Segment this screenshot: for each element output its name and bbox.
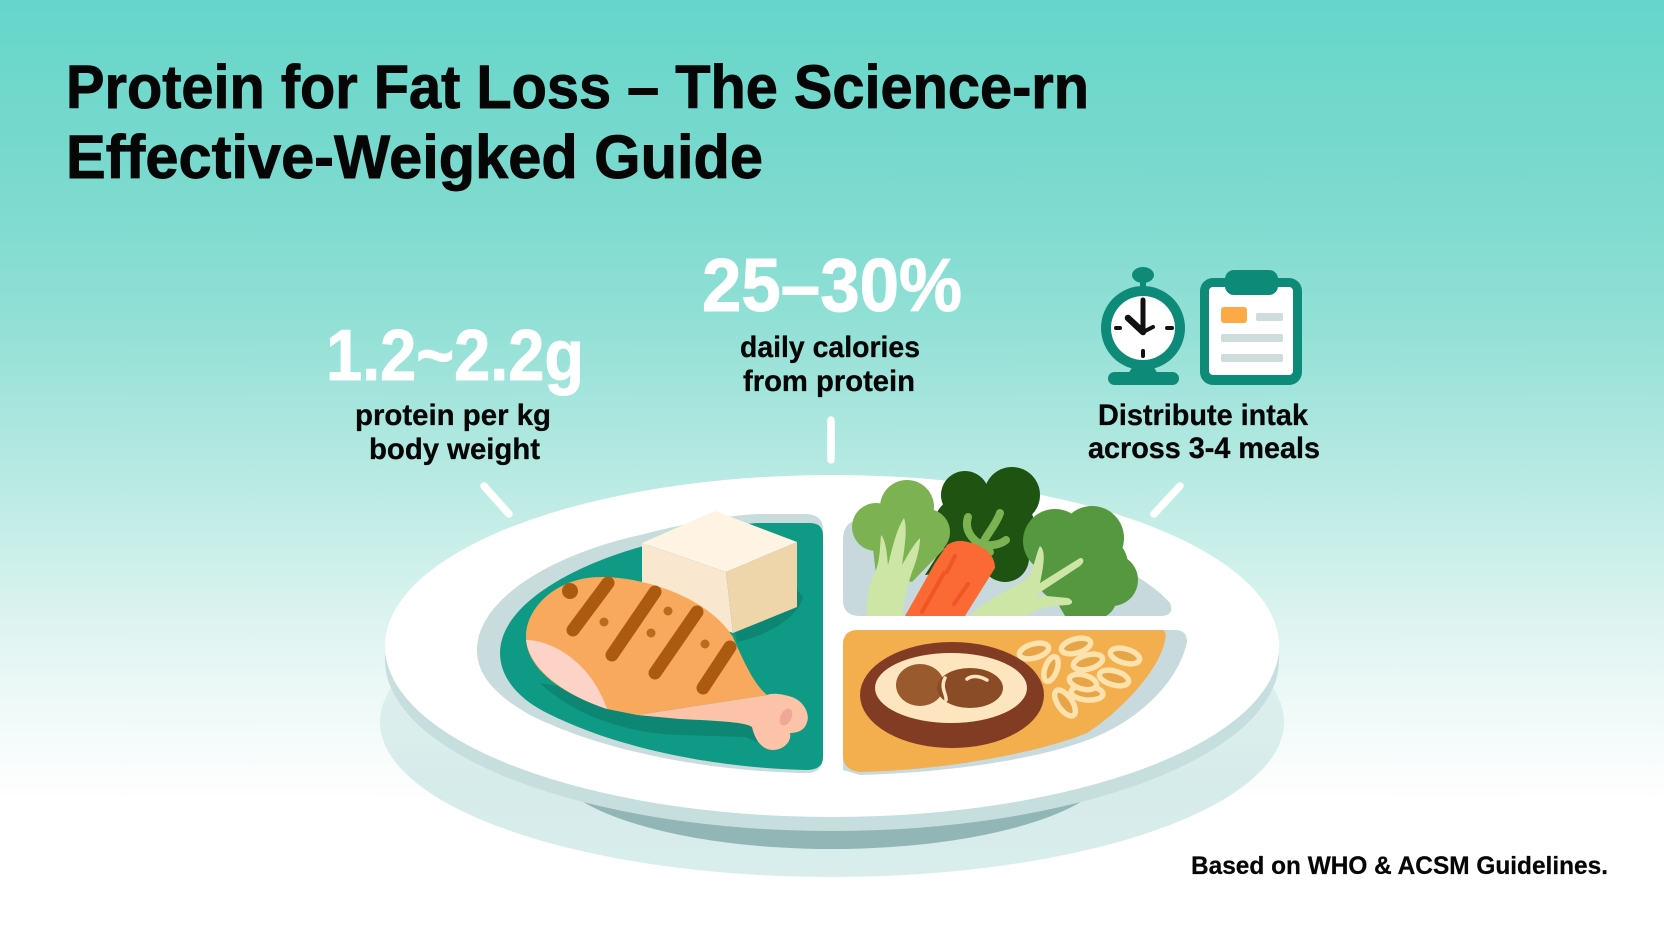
compartment: vegetables — [843, 467, 1171, 619]
light broccoli — [852, 480, 950, 616]
footer source note: Based on WHO & ACSM Guidelines. — [1191, 852, 1608, 880]
compartment: protein — [477, 511, 823, 773]
stat: meal distribution: across 3-4 meals — [1088, 432, 1320, 465]
icon: clipboard — [1200, 270, 1302, 385]
patty — [860, 642, 1044, 748]
grains — [1018, 635, 1141, 719]
chicken drumstick — [526, 577, 808, 750]
stat: daily calories: from protein — [743, 365, 915, 398]
plate rim — [385, 489, 1279, 831]
tofu cube — [642, 511, 803, 642]
dark broccoli — [925, 467, 1040, 582]
title: Effective-Weigked Guide — [66, 123, 763, 191]
icon: stopwatch — [1101, 267, 1185, 385]
stat: daily calories — [702, 243, 962, 398]
callout ticks — [484, 420, 1180, 514]
stat: protein per kg: 1.2~2.2g — [326, 316, 584, 396]
stat: daily calories: daily calories — [740, 331, 920, 364]
right broccoli — [970, 506, 1138, 619]
plate shadow — [380, 567, 1284, 877]
plate top — [385, 475, 1279, 817]
stat: protein per kg: body weight — [369, 433, 540, 466]
stat: daily calories: 25–30% — [702, 243, 962, 327]
plate foot — [550, 671, 1114, 849]
stat: protein per kg — [326, 316, 584, 466]
stat: meal distribution: Distribute intak — [1098, 399, 1308, 432]
plate — [380, 475, 1284, 877]
stat: meal distribution — [1088, 399, 1320, 465]
title: Protein for Fat Loss – The Science-rn — [66, 53, 1089, 121]
compartment: grains and patty — [843, 630, 1187, 775]
title — [66, 53, 1089, 191]
carrot — [905, 541, 995, 616]
stat: protein per kg: protein per kg — [355, 399, 551, 432]
